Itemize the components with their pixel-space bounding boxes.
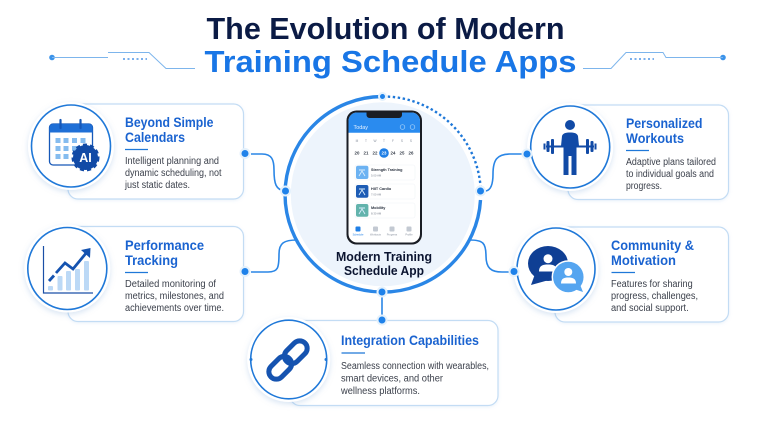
heading: [125, 237, 204, 268]
bottom nav: Workouts: [370, 232, 382, 236]
phone mockup: 24: [391, 151, 396, 156]
schedule items: HIIT Cardio: [371, 187, 392, 191]
calendar row: S: [410, 139, 412, 143]
phone header: [348, 112, 420, 133]
body text: Features for sharing: [611, 279, 693, 290]
body text: [626, 157, 716, 192]
phone mockup: 23: [382, 151, 387, 156]
central hub circle: [281, 93, 485, 296]
body text: Intelligent planning and: [125, 156, 219, 167]
bottom nav: [353, 226, 413, 236]
calendar row: [356, 139, 412, 143]
panel: performance tracking: [24, 224, 250, 322]
calendar row: S: [401, 139, 403, 143]
phone body: [346, 110, 422, 244]
body text: Adaptive plans tailored: [626, 157, 716, 168]
phone mockup: 26: [409, 151, 414, 156]
phone mockup: 25: [400, 151, 405, 156]
heading: Beyond Simple: [125, 114, 214, 130]
title: Training Schedule Apps: [204, 45, 576, 79]
calendar row: T: [383, 139, 385, 143]
phone mockup: 21: [364, 151, 369, 156]
heading: Personalized: [626, 115, 702, 131]
calendar row: M: [356, 139, 359, 143]
body text: Seamless connection with wearables,: [341, 361, 489, 372]
heading: [125, 114, 214, 145]
schedule items: Strength Training: [371, 168, 403, 172]
schedule items: Mobility: [371, 206, 386, 210]
bottom nav: Schedule: [353, 232, 364, 236]
body text: Detailed monitoring of: [125, 279, 216, 290]
heading: Workouts: [626, 130, 684, 146]
body text: progress, challenges,: [611, 291, 698, 302]
phone mockup: 22: [373, 151, 378, 156]
heading: Motivation: [611, 252, 676, 268]
decorative circuit line right: [583, 52, 726, 68]
decorative circuit line left: [49, 52, 195, 68]
hub label: Schedule App: [344, 263, 424, 278]
body text: dynamic scheduling, not: [125, 168, 222, 179]
phone mockup: [346, 110, 422, 244]
body text: smart devices, and other: [341, 374, 444, 384]
body text: and social support.: [611, 303, 689, 314]
icon: growth chart: [24, 224, 110, 312]
connector lines: [251, 154, 527, 320]
body text: progress.: [626, 181, 662, 192]
heading: Community &: [611, 237, 694, 253]
panel: beyond simple calendars: [28, 102, 250, 199]
heading: Tracking: [125, 252, 178, 268]
heading: Performance: [125, 237, 204, 253]
calendar row: F: [392, 139, 394, 143]
heading: Integration Capabilities: [341, 332, 479, 348]
bottom nav: Profile: [405, 232, 413, 236]
icon: AI calendar: [28, 102, 114, 190]
calendar row: T: [365, 139, 367, 143]
body text: [611, 279, 698, 314]
panel: community and motivation: [510, 225, 728, 322]
body text: [124, 156, 222, 191]
body text: metrics, milestones, and: [125, 291, 224, 302]
panel: personalized workouts: [522, 103, 728, 200]
body text: just static dates.: [124, 180, 190, 191]
body text: wellness platforms.: [340, 386, 420, 397]
title: The Evolution of Modern: [206, 12, 564, 46]
hub label: Modern Training: [336, 249, 432, 264]
icon: chain link: [247, 317, 330, 402]
phone mockup: Today: [354, 125, 368, 131]
icon: AI calendar: AI: [79, 151, 92, 165]
icon: weightlifter: [527, 103, 613, 191]
schedule items: [355, 165, 415, 218]
hub label: [336, 249, 432, 278]
body text: achievements over time.: [125, 303, 224, 314]
heading: [611, 237, 694, 268]
schedule items: 8:30 AM: [371, 212, 382, 216]
body text: [125, 279, 224, 314]
body text: to individual goals and: [626, 169, 714, 180]
bottom nav: Progress: [387, 232, 398, 236]
phone mockup: 20: [355, 151, 360, 156]
icon: chat bubbles: [514, 225, 598, 313]
panel: integration capabilities: [247, 316, 498, 406]
heading: Calendars: [125, 129, 185, 145]
schedule items: 5:00 AM: [371, 174, 382, 178]
schedule items: 7:00 AM: [371, 192, 382, 196]
title: [204, 12, 576, 79]
calendar row: W: [373, 139, 377, 143]
body text: [340, 361, 489, 397]
heading: [626, 115, 702, 146]
